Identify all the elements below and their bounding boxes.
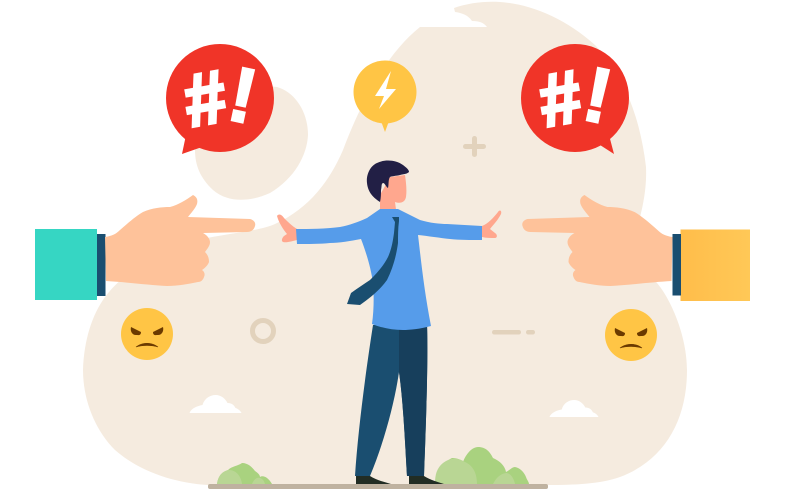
left shoe (356, 476, 391, 484)
right shoe (409, 476, 444, 484)
navy band right (672, 234, 681, 296)
right pointing hand (522, 195, 750, 301)
left hand of man (277, 215, 297, 242)
right trouser leg shade (399, 325, 427, 476)
hair (367, 161, 409, 202)
right hand of man (482, 211, 501, 238)
man (277, 161, 501, 484)
decorative ring (252, 320, 274, 342)
yellow bubble with lightning (354, 60, 416, 132)
neck and face (380, 175, 406, 217)
left speech bubble (166, 44, 274, 154)
shirt (296, 209, 482, 330)
cloud right (549, 400, 599, 417)
ground line (208, 484, 548, 489)
bush right (435, 447, 529, 484)
hash symbol right: # (533, 54, 588, 143)
background blob: main (83, 2, 687, 485)
teal cuff (35, 229, 97, 300)
hand right (522, 195, 672, 286)
trousers (355, 325, 427, 476)
exclamation mark right: ! (576, 49, 620, 141)
exclamation mark left: ! (221, 49, 265, 141)
hand (105, 195, 255, 286)
navy band (97, 234, 106, 296)
right speech bubble (521, 44, 629, 154)
tie (347, 217, 399, 305)
left pointing hand (35, 195, 255, 300)
background blob: small (195, 87, 308, 200)
lightning bolt (375, 71, 396, 109)
hash symbol left: # (178, 54, 233, 143)
cloud left (190, 395, 242, 413)
yellow cuff (680, 230, 750, 301)
bush left (217, 463, 272, 484)
angry emoji left (121, 308, 173, 360)
decorative dashes (492, 330, 535, 334)
decorative plus (463, 136, 486, 157)
angry emoji right (605, 309, 657, 361)
